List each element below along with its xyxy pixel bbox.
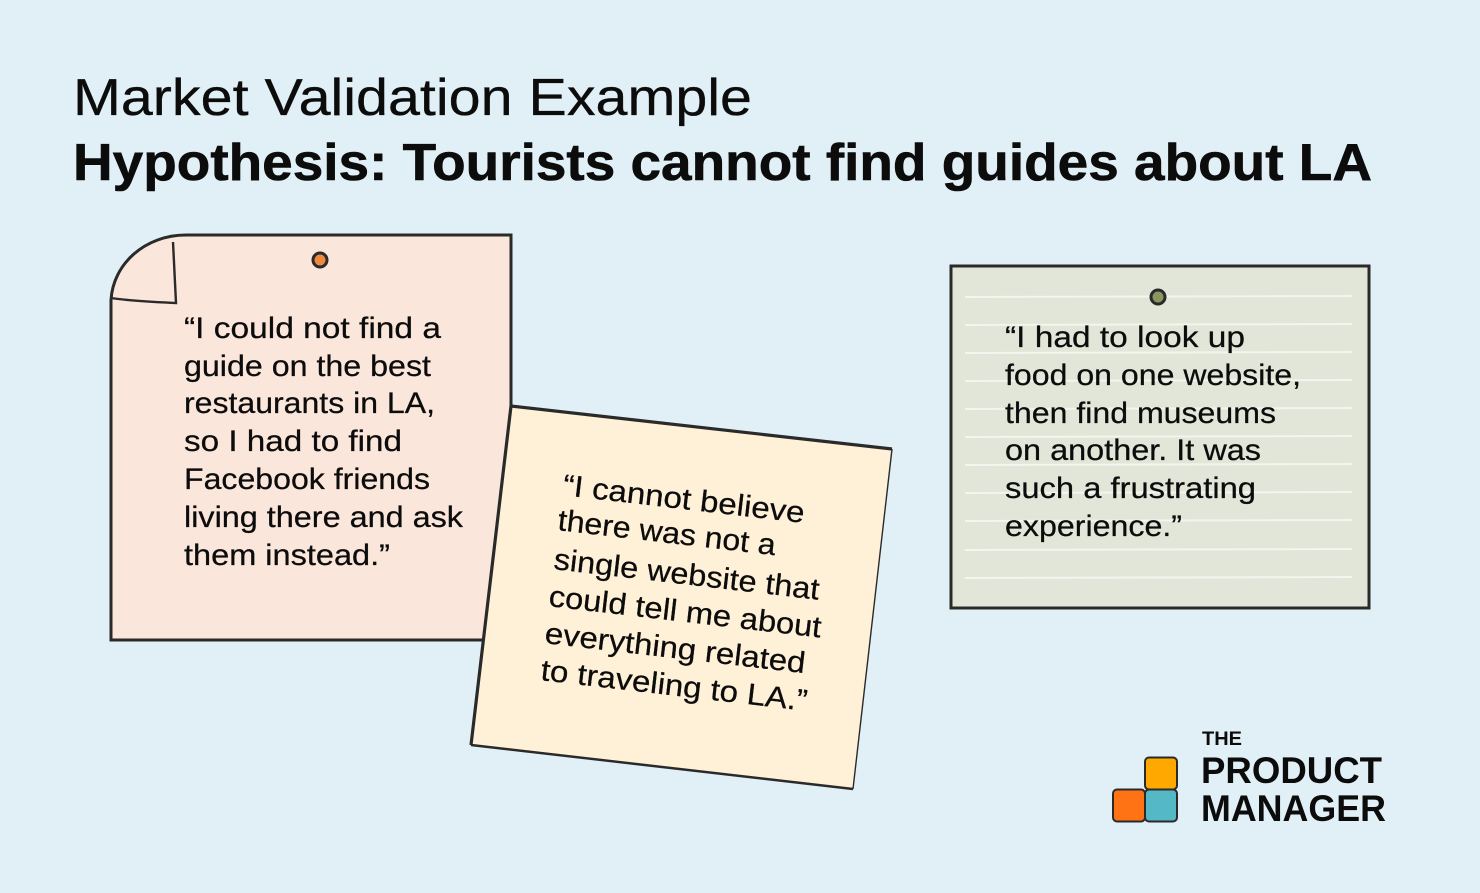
logo wordmark: PRODUCT <box>1201 750 1382 791</box>
heading: market validation example: Market Validation Example <box>73 69 752 127</box>
heading: hypothesis: Hypothesis: Tourists cannot find guides about LA <box>73 134 1372 192</box>
quote text: guide on the best <box>184 350 432 383</box>
logo wordmark: THE <box>1202 729 1242 750</box>
quote text: such a frustrating <box>1005 472 1256 505</box>
pin <box>1151 290 1165 304</box>
quote text: experience.” <box>1005 510 1182 543</box>
note body <box>951 266 1369 608</box>
icon: logo squares <box>1113 758 1177 822</box>
logo wordmark <box>1201 729 1386 829</box>
logo wordmark: MANAGER <box>1201 788 1386 829</box>
pin <box>313 253 327 267</box>
folded corner <box>111 242 176 303</box>
panel: pink sticky note <box>111 235 511 640</box>
quote text: restaurants in LA, <box>184 387 435 420</box>
panel: green lined note <box>951 266 1369 608</box>
panel: yellow sticky note <box>471 406 892 789</box>
quote text: on another. It was <box>1005 434 1261 467</box>
quote text: Facebook friends <box>184 463 430 496</box>
quote text: could tell me about <box>547 580 824 645</box>
ruled lines <box>965 296 1352 578</box>
note body <box>471 406 892 789</box>
quote text: to traveling to LA.” <box>539 654 809 718</box>
quote text <box>184 312 464 572</box>
quote text: “I cannot believe <box>561 469 806 530</box>
quote text <box>539 469 824 718</box>
logo: the product manager <box>1113 729 1386 829</box>
quote text: food on one website, <box>1005 359 1301 392</box>
quote text <box>1005 321 1301 543</box>
quote text: everything related <box>543 617 807 680</box>
quote text: living there and ask <box>184 501 464 534</box>
quote text: them instead.” <box>184 539 390 572</box>
note body <box>111 235 511 640</box>
quote text: there was not a <box>556 504 778 562</box>
quote text: so I had to find <box>184 425 402 458</box>
quote text: then find museums <box>1005 397 1276 430</box>
title <box>73 69 1372 192</box>
quote text: single website that <box>552 543 822 607</box>
quote text: “I had to look up <box>1005 321 1245 354</box>
note outline <box>471 406 892 789</box>
quote text: “I could not find a <box>184 312 441 345</box>
